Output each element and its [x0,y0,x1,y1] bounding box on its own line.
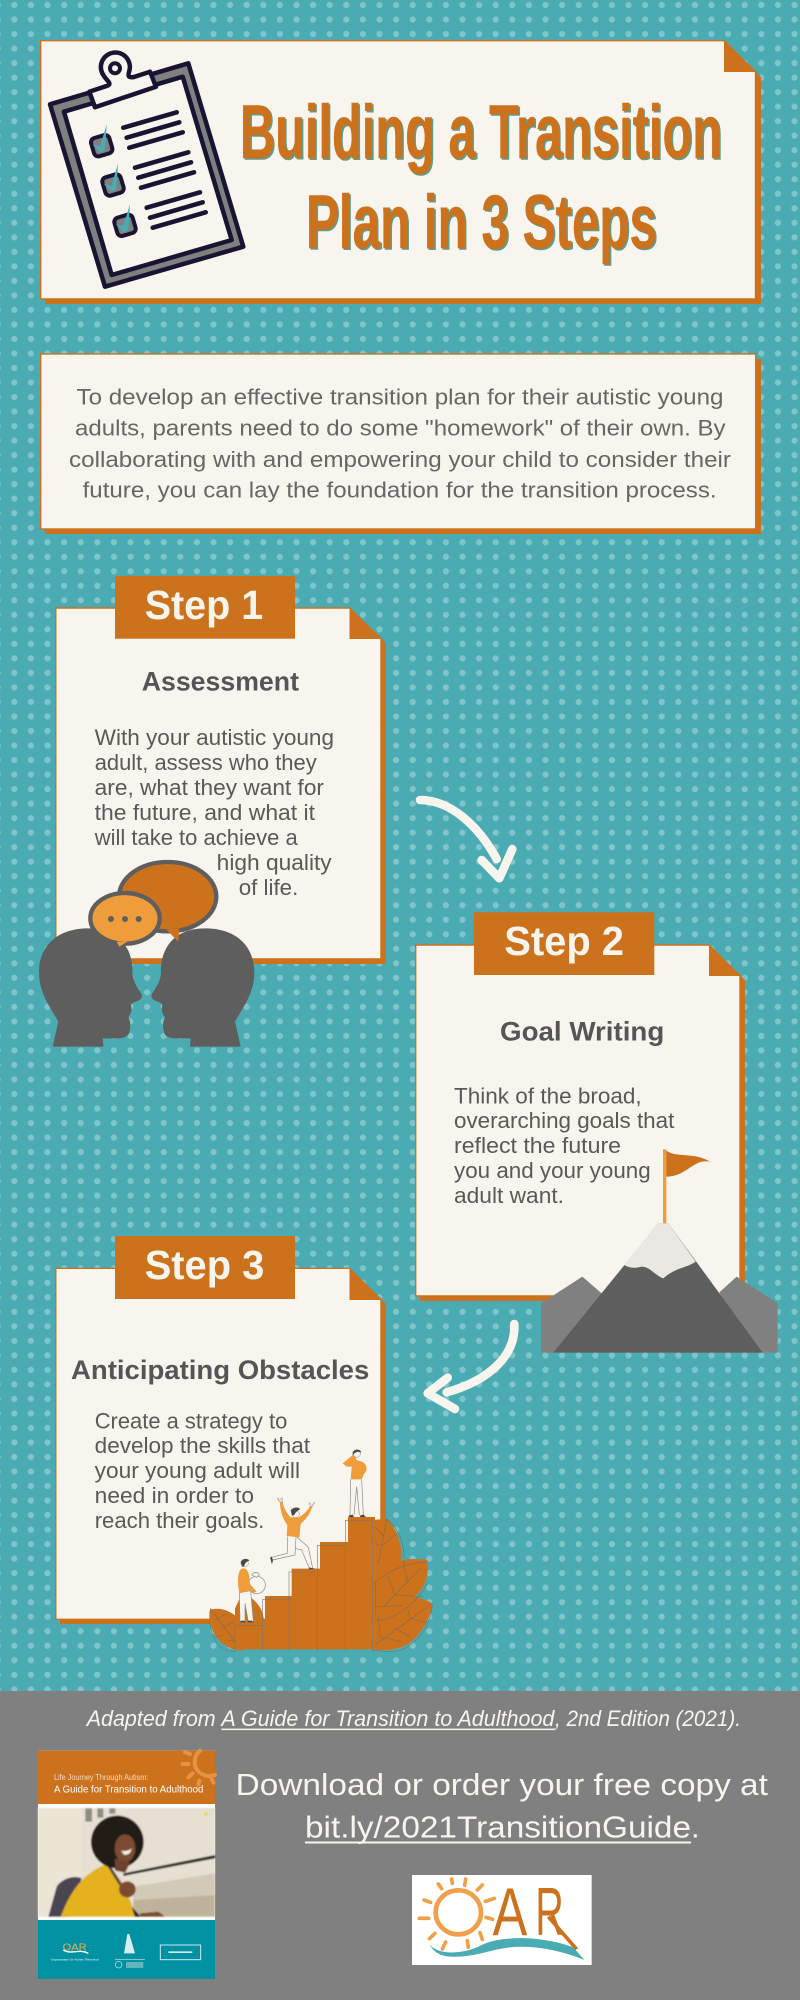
arrow: step 1 to step 2 [420,800,512,878]
step 3 tab [115,1236,295,1299]
step 1 body [94,725,334,900]
step 3 body: develop the skills that [95,1433,311,1458]
panel: step 3 anticipating obstacles [56,1236,386,1624]
step 3 body: Create a strategy to [95,1408,287,1433]
step 1 tab: Step 1 [145,582,263,628]
source credit: Adapted from [85,1706,216,1731]
logo letters: A [493,1874,528,1950]
intro text: To develop an effective transition plan for their autistic young [76,385,723,410]
arrow: step 2 to step 3 [428,1324,514,1409]
OAR logo [412,1874,592,1965]
step 2 tab: Step 2 [504,918,624,964]
person carrying sack at the bottom [238,1559,265,1622]
panel: step 2 goal writing [416,912,745,1301]
icon: two heads talking with speech bubbles [39,862,254,1047]
step 3 body: reach their goals. [95,1508,264,1533]
footer band [0,1691,800,2000]
logo letters [493,1874,577,1950]
left head [39,928,142,1047]
cover footer with logos: Organization for Autism Research [51,1957,99,1961]
download call to action [236,1767,768,1845]
download call to action: Download or order your free copy at [236,1767,768,1802]
title panel paper [41,41,755,299]
small speech bubble [90,893,160,947]
download call to action: . [691,1810,700,1845]
source credit: , 2nd Edition (2021). [555,1706,741,1731]
step 1 heading: Assessment [142,667,299,697]
step 1 tab [115,576,295,639]
icon: clipboard [50,53,243,287]
cover photo of smiling young woman [38,1808,215,1917]
intro text: adults, parents need to do some "homework" of their own. By [75,416,726,441]
step 2 body: you and your young [454,1158,651,1183]
step 2 heading: Goal Writing [500,1017,664,1047]
person looking out on top step [343,1450,367,1517]
step 1 body: of life. [239,875,298,900]
panel: title [41,41,761,304]
step 2 body: reflect the future [454,1133,621,1158]
step 1 body: high quality [217,850,332,875]
step 3 body: your young adult will [95,1458,300,1483]
step 2 body: overarching goals that [454,1108,675,1133]
intro text: collaborating with and empowering your child to consider their [69,447,732,472]
stairs [235,1517,375,1652]
step 3 tab: Step 3 [145,1242,264,1288]
step 3 body: need in order to [95,1483,254,1508]
download call to action: bit.ly/2021TransitionGuide [305,1810,691,1845]
panel: introduction [41,354,761,534]
title panel shadow and fold [45,41,761,304]
icon: mountain with flag [541,1149,778,1353]
step 3 body [95,1408,311,1533]
step 2 body: adult want. [454,1183,564,1208]
step 1 body: the future, and what it [95,800,316,825]
step 1 body: are, what they want for [95,775,325,800]
step 2 body: Think of the broad, [454,1083,642,1108]
right head [152,928,254,1047]
cover footer with logos: OAR [63,1943,87,1954]
panel: step 1 assessment [56,576,386,964]
logo letters: R [535,1874,564,1950]
large speech bubble [119,862,216,942]
step 1 body: With your autistic young [95,725,334,750]
source credit: A Guide for Transition to Adulthood [219,1706,556,1731]
title panel corner fold [724,41,757,72]
cover header: Life Journey Through Autism: [54,1773,148,1782]
intro text: future, you can lay the foundation for the transition process. [83,478,717,502]
title text [240,90,724,266]
intro text [69,385,732,502]
step 3 heading: Anticipating Obstacles [71,1355,369,1385]
cover header [38,1751,215,1804]
cover header: A Guide for Transition to Adulthood [54,1785,203,1796]
step 2 tab [474,912,654,975]
cover footer with logos [38,1920,215,1979]
step 1 body: will take to achieve a [94,825,298,850]
book cover [38,1751,215,1979]
step 1 body: adult, assess who they [95,750,317,775]
source credit [85,1706,741,1731]
person leaping in middle [270,1497,316,1569]
logo wave [429,1938,584,1960]
step 2 body [454,1083,675,1208]
logo sun [419,1879,494,1949]
icon: stairs with leaves and climbing people [209,1450,432,1652]
leaves [209,1519,432,1652]
